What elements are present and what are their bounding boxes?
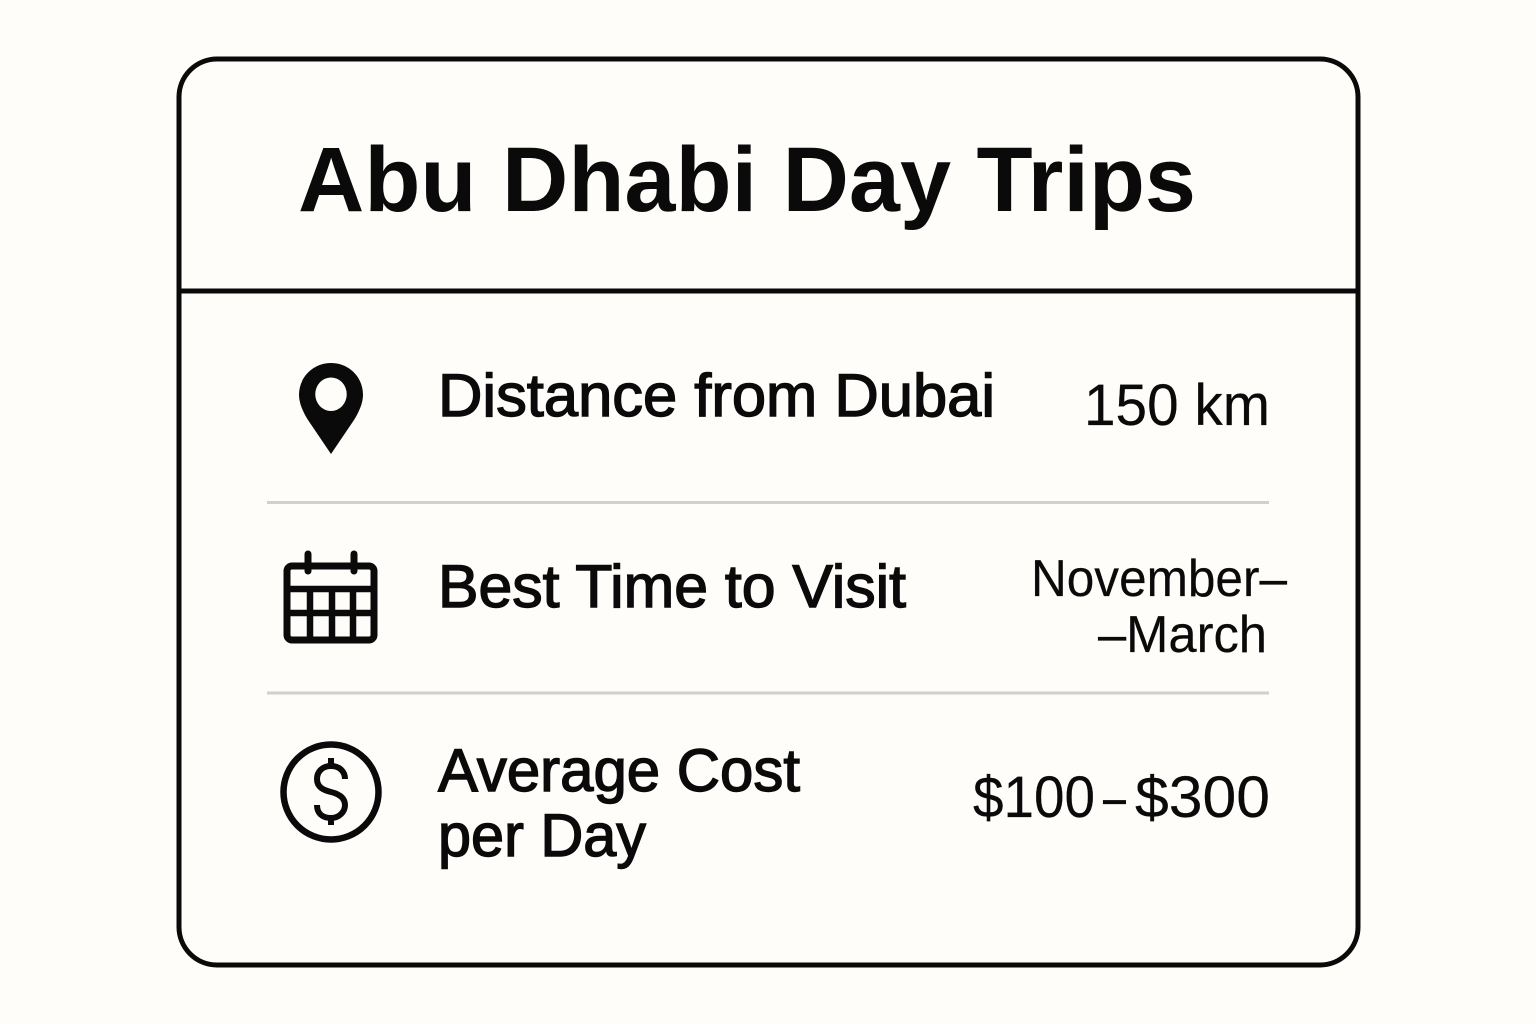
label: distance: Distance from Dubai [438, 362, 995, 429]
label: average cost: Average Cost [438, 737, 800, 804]
title: Abu Dhabi Day Trips [298, 129, 1196, 231]
value: best time [1031, 550, 1287, 664]
value: best time: –March [1098, 606, 1267, 664]
value: average cost [973, 765, 1270, 830]
label: best time: Best Time to Visit [438, 553, 906, 620]
icon: location pin [299, 363, 363, 454]
value: average cost: $300 [1135, 765, 1270, 830]
label: average cost: per Day [438, 802, 646, 869]
icon: dollar coin [284, 744, 378, 840]
value: distance: 150 km [1084, 373, 1270, 438]
value: best time: November– [1031, 550, 1287, 608]
panel: card [179, 59, 1358, 965]
label: average cost [438, 737, 800, 869]
value: average cost: $100 [973, 765, 1095, 830]
icon: calendar [287, 554, 374, 640]
value: average cost: – [1103, 765, 1127, 830]
